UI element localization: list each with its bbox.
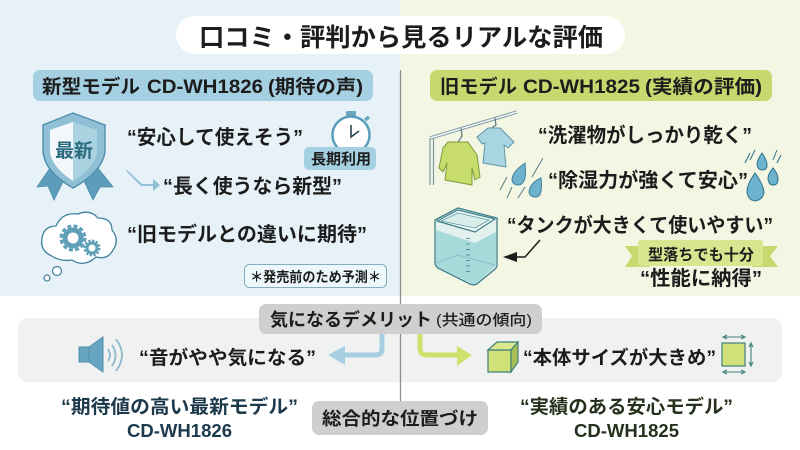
tag: drawbacks: (共通の傾向) <box>436 312 532 329</box>
title: 口コミ・評判から見るリアルな評価 <box>199 24 603 52</box>
icon: large drops <box>745 150 781 201</box>
heading: new model: 新型モデル <box>42 75 140 98</box>
icon: latest badge <box>37 113 113 200</box>
label: long-term use: 長期利用 <box>311 151 371 168</box>
icon: small drops and rain <box>500 158 543 198</box>
note: prediction: ＊発売前のため予測＊ <box>250 269 381 285</box>
panel: old model <box>400 0 800 296</box>
quote: performance: “性能に納得” <box>640 267 762 290</box>
quote: dehumidify: “除湿力が強くて安心” <box>548 168 748 192</box>
icon: water tank <box>435 208 497 285</box>
quote: tank: “タンクが大きくて使いやすい” <box>507 213 773 237</box>
icon: size square <box>722 335 753 374</box>
tag: overall positioning: 総合的な位置づけ <box>322 409 478 429</box>
title <box>176 16 625 54</box>
ribbon: good enough: 型落ちでも十分 <box>648 246 754 264</box>
heading: old model: (実績の評価) <box>645 76 762 98</box>
label: long-term use <box>304 147 376 170</box>
icon: stopwatch <box>332 111 370 154</box>
quote: noise: “音がやや気になる” <box>139 346 316 369</box>
note: prediction <box>244 264 386 288</box>
icon: thought cloud with gears <box>42 212 116 281</box>
summary: new model: CD-WH1826 <box>127 421 232 441</box>
heading: new model: (期待の声) <box>268 76 363 98</box>
summary: old model <box>520 395 733 441</box>
arrow: to size <box>420 334 460 355</box>
divider line <box>400 70 402 404</box>
heading: old model: CD-WH1825 <box>523 77 640 98</box>
tag: drawbacks <box>259 304 542 334</box>
heading: new model <box>33 70 373 101</box>
tag: drawbacks: 気になるデメリット <box>270 309 432 330</box>
icon: laundry <box>430 112 517 185</box>
heading: old model: 旧モデル <box>440 75 517 98</box>
heading: new model: CD-WH1826 <box>147 77 263 98</box>
quote: long use: “長く使うなら新型” <box>163 175 342 198</box>
arrow: to long-use quote <box>126 170 160 191</box>
summary: new model <box>61 395 298 441</box>
ribbon: good enough <box>625 240 778 267</box>
summary: old model: “実績のある安心モデル” <box>520 395 733 418</box>
arrow: to sound <box>344 334 382 355</box>
quote: anshin: “安心して使えそう” <box>127 126 303 149</box>
arrow: to tank <box>503 240 540 262</box>
quote: difference: “旧モデルとの違いに期待” <box>127 222 367 246</box>
band: drawbacks <box>18 318 782 382</box>
icon: latest badge: 最新 <box>55 140 93 162</box>
heading: old model <box>430 70 772 101</box>
icon: speaker <box>79 337 122 372</box>
summary: new model: “期待値の高い最新モデル” <box>61 395 298 418</box>
quote: size: “本体サイズが大きめ” <box>523 346 716 369</box>
quote: laundry: “洗濯物がしっかり乾く” <box>538 123 752 147</box>
tag: overall positioning <box>312 401 488 435</box>
summary: old model: CD-WH1825 <box>574 421 679 441</box>
panel: new model <box>0 0 400 296</box>
icon: cube <box>488 342 518 372</box>
